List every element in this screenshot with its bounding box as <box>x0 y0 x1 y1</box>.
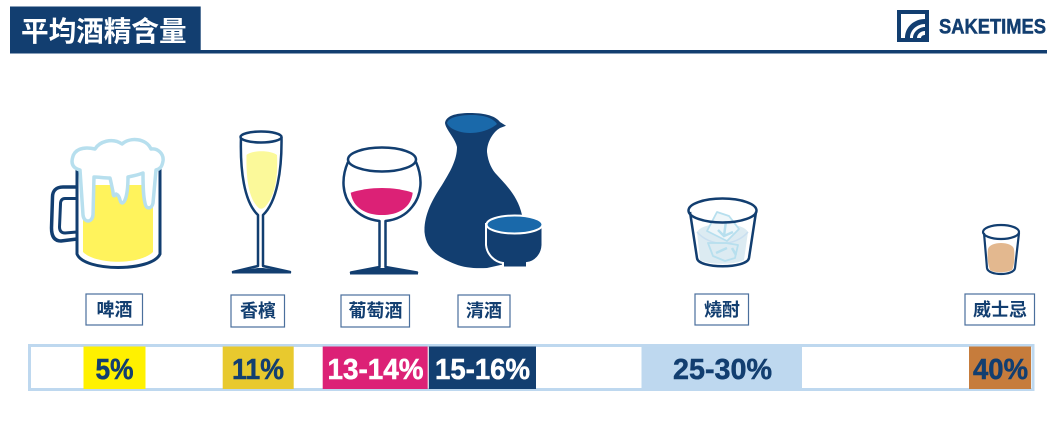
segment: shochu 25-30%: 25-30% <box>673 354 772 386</box>
label: sake <box>458 295 510 327</box>
segment: wine 13-14%: 13-14% <box>328 354 424 386</box>
logo: SAKETIMES <box>897 10 1046 42</box>
label: wine <box>341 295 410 327</box>
label: shochu <box>695 294 748 325</box>
label: beer: 啤酒 <box>96 300 132 320</box>
icon: wine glass <box>343 148 421 274</box>
logo: SAKETIMES: SAKETIMES <box>939 16 1046 38</box>
label: whisky: 威士忌 <box>973 300 1027 320</box>
icon: beer mug <box>52 140 163 268</box>
segment: champagne 11% <box>223 346 294 389</box>
segment: champagne 11%: 11% <box>232 354 284 386</box>
label: champagne <box>231 295 284 327</box>
label: shochu: 燒酎 <box>704 300 740 320</box>
label: sake: 清酒 <box>466 301 502 321</box>
segment: beer 5% <box>84 346 146 389</box>
segment: sake 15-16%: 15-16% <box>435 354 530 386</box>
label: wine: 葡萄酒 <box>348 301 402 321</box>
icon: whisky glass <box>983 225 1019 274</box>
icon: tokkuri and sake cup <box>424 113 542 268</box>
bar: alcohol content scale <box>30 344 1033 391</box>
label: beer <box>86 294 142 325</box>
segment: shochu 25-30% <box>642 344 802 391</box>
label: champagne: 香檳 <box>240 301 276 321</box>
segment: whisky 40%: 40% <box>973 354 1028 386</box>
label: whisky <box>965 294 1034 325</box>
title: 平均酒精含量 <box>21 16 187 47</box>
segment: beer 5%: 5% <box>96 354 134 386</box>
icon: shochu glass with ice <box>688 198 756 266</box>
icon: champagne flute <box>232 132 291 274</box>
title <box>10 6 1047 54</box>
